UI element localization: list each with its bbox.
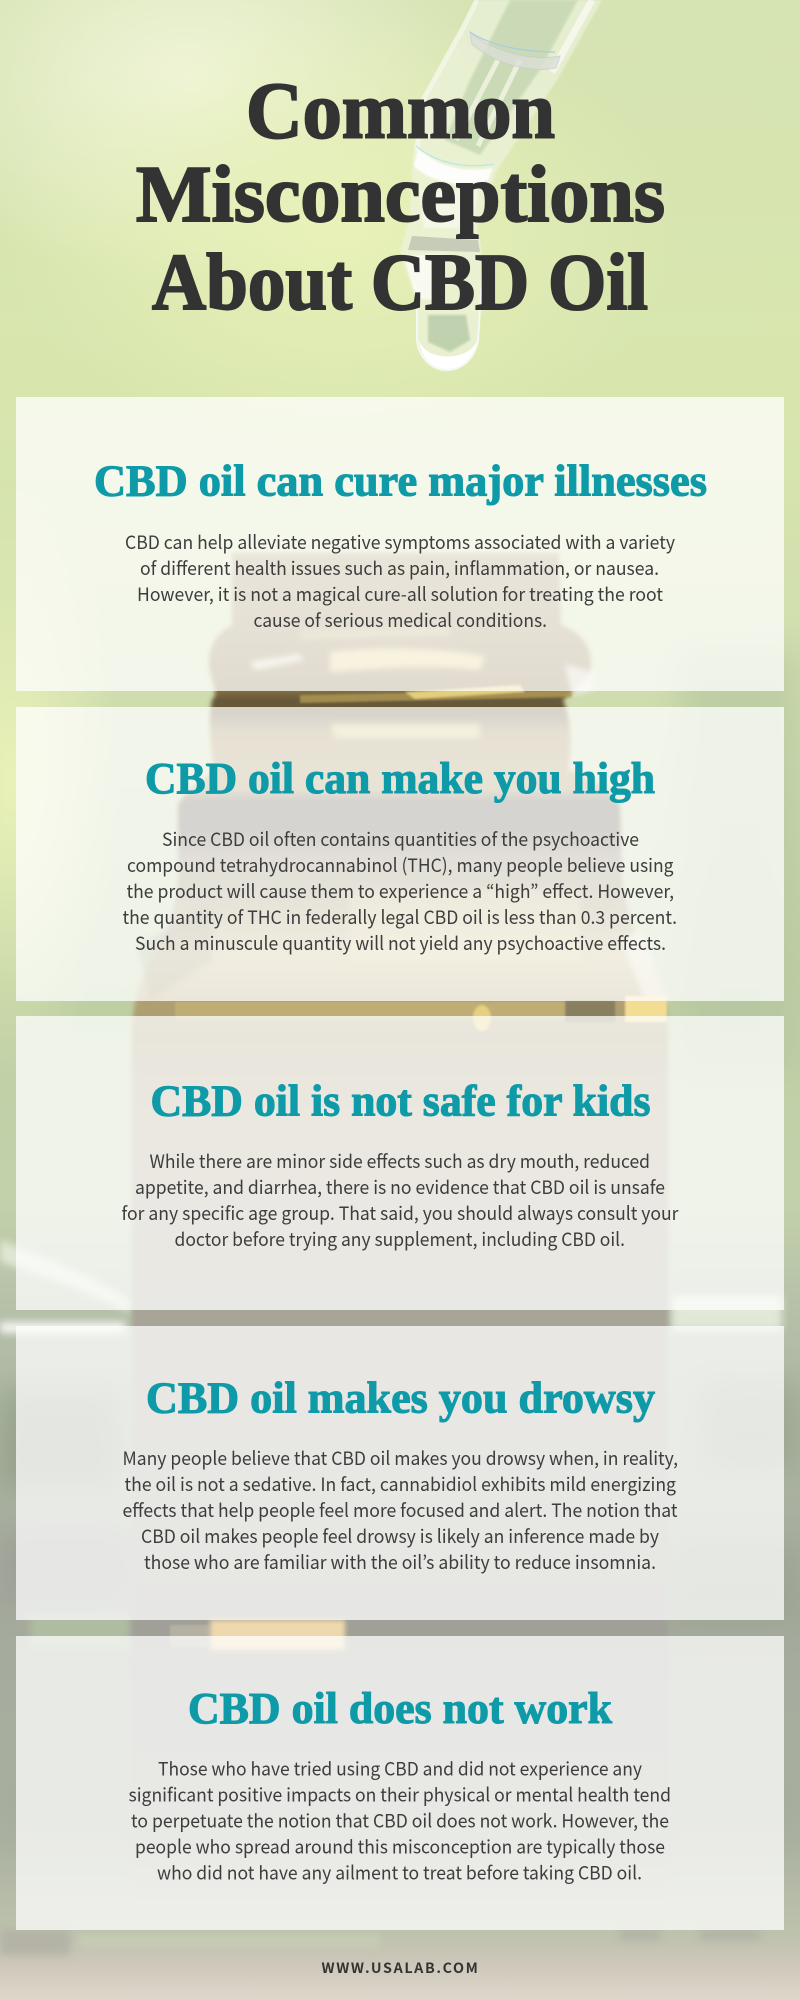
body text: Many people believe that CBD oil makes you drowsy when, in reality, [122, 1445, 678, 1471]
body text [128, 1756, 671, 1886]
body text: cause of serious medical conditions. [254, 607, 547, 633]
body text [122, 1445, 678, 1575]
bottle silhouette [132, 553, 668, 1900]
bottle highlights [138, 626, 668, 1000]
body text [122, 1148, 679, 1252]
dropper [400, 0, 602, 370]
body text: of different health issues such as pain, inflammation, or nausea. [140, 555, 659, 581]
body text: the quantity of THC in federally legal CBD oil is less than 0.3 percent. [122, 904, 677, 930]
body text: Such a minuscule quantity will not yield any psychoactive effects. [135, 930, 666, 956]
main title: About CBD Oil [152, 239, 648, 327]
panel: makes you drowsy [16, 1326, 784, 1620]
body text [122, 826, 677, 956]
body text: effects that help people feel more focused and alert. The notion that [122, 1497, 678, 1523]
body text [125, 529, 675, 633]
panel: make you high [16, 707, 784, 1001]
blurred leaves [0, 1380, 800, 1820]
body text: CBD oil makes people feel drowsy is likely an inference made by [141, 1523, 659, 1549]
body text: While there are minor side effects such as dry mouth, reduced [150, 1148, 650, 1174]
body text: CBD can help alleviate negative symptoms associated with a variety [125, 529, 675, 555]
body text: compound tetrahydrocannabinol (THC), many people believe using [127, 852, 674, 878]
body text: significant positive impacts on their physical or mental health tend [128, 1782, 671, 1808]
heading: CBD oil does not work [188, 1684, 613, 1733]
body text: Since CBD oil often contains quantities of the psychoactive [162, 826, 639, 852]
main title [136, 68, 665, 327]
heading: CBD oil can cure major illnesses [94, 456, 707, 506]
panel: does not work [16, 1636, 784, 1930]
heading: CBD oil can make you high [145, 754, 655, 803]
body text: Those who have tried using CBD and did not experience any [158, 1756, 642, 1782]
body text: the oil is not a sedative. In fact, cannabidiol exhibits mild energizing [124, 1471, 677, 1497]
main title: Common [246, 68, 555, 156]
main title: Misconceptions [136, 151, 665, 239]
body text: the product will cause them to experience a “high” effect. However, [126, 878, 674, 904]
footer url: WWW.USALAB.COM [322, 1958, 480, 1978]
body text: to perpetuate the notion that CBD oil does not work. However, the [131, 1808, 669, 1834]
body text: However, it is not a magical cure-all solution for treating the root [137, 581, 663, 607]
body text: people who spread around this misconception are typically those [135, 1834, 665, 1860]
heading: CBD oil makes you drowsy [146, 1374, 655, 1422]
panel: not safe for kids [16, 1016, 784, 1310]
body text: doctor before trying any supplement, including CBD oil. [174, 1226, 625, 1252]
body text: appetite, and diarrhea, there is no evidence that CBD oil is unsafe [135, 1174, 665, 1200]
body text: who did not have any ailment to treat before taking CBD oil. [157, 1860, 642, 1886]
heading: CBD oil is not safe for kids [150, 1076, 650, 1126]
panel: cure major illnesses [16, 397, 784, 691]
body text: those who are familiar with the oil’s ability to reduce insomnia. [144, 1549, 656, 1575]
body text: for any specific age group. That said, you should always consult your [122, 1200, 679, 1226]
